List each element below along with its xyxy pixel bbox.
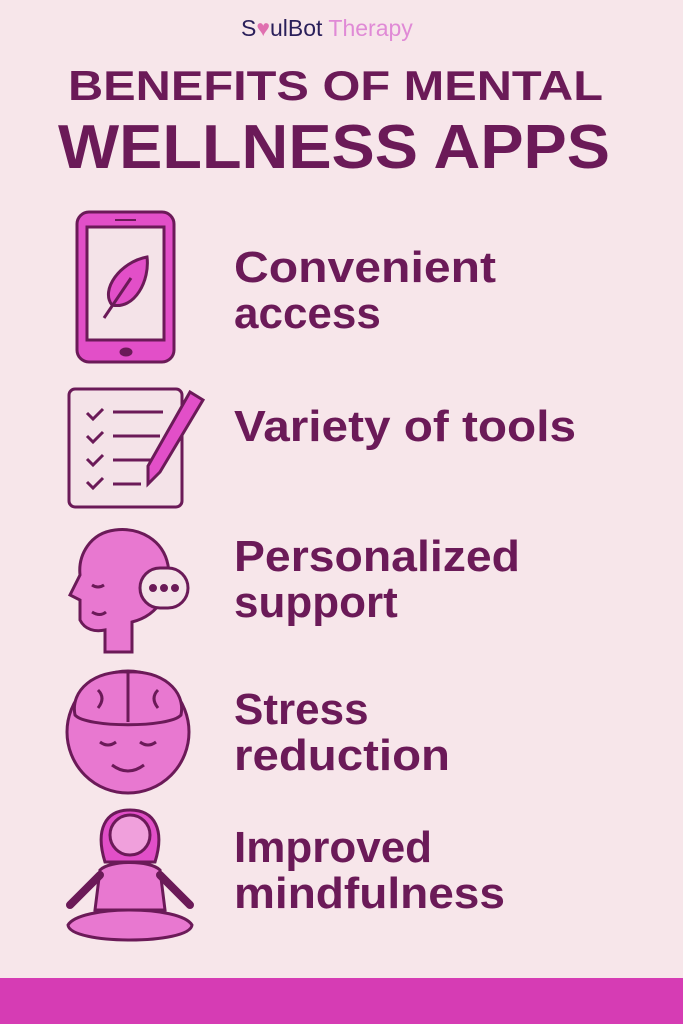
title bbox=[58, 62, 610, 182]
icon: meditating person bbox=[68, 810, 192, 940]
logo: S♥ulBot Therapy bbox=[241, 15, 413, 41]
text: convenient access: Convenient bbox=[234, 243, 496, 292]
text: stress reduction: Stress bbox=[234, 685, 369, 734]
text: convenient access bbox=[234, 243, 496, 338]
text: improved mindfulness bbox=[234, 823, 505, 918]
text: stress reduction: reduction bbox=[234, 731, 450, 780]
text: personalized support bbox=[234, 532, 520, 627]
text: variety of tools: Variety of tools bbox=[234, 402, 576, 451]
icon: checklist with pencil bbox=[69, 389, 203, 507]
text: improved mindfulness: mindfulness bbox=[234, 869, 505, 918]
text: personalized support: Personalized bbox=[234, 532, 520, 581]
text: personalized support: support bbox=[234, 578, 398, 627]
title: WELLNESS APPS bbox=[58, 113, 610, 182]
icon: head with speech bubble bbox=[70, 530, 188, 652]
text: convenient access: access bbox=[234, 289, 381, 338]
text: stress reduction bbox=[234, 685, 450, 780]
icon: tablet with leaf bbox=[77, 212, 174, 362]
title: BENEFITS OF MENTAL bbox=[68, 62, 603, 109]
icon: brain face bbox=[67, 671, 189, 793]
footer bar bbox=[0, 978, 683, 1024]
text: improved mindfulness: Improved bbox=[234, 823, 432, 872]
